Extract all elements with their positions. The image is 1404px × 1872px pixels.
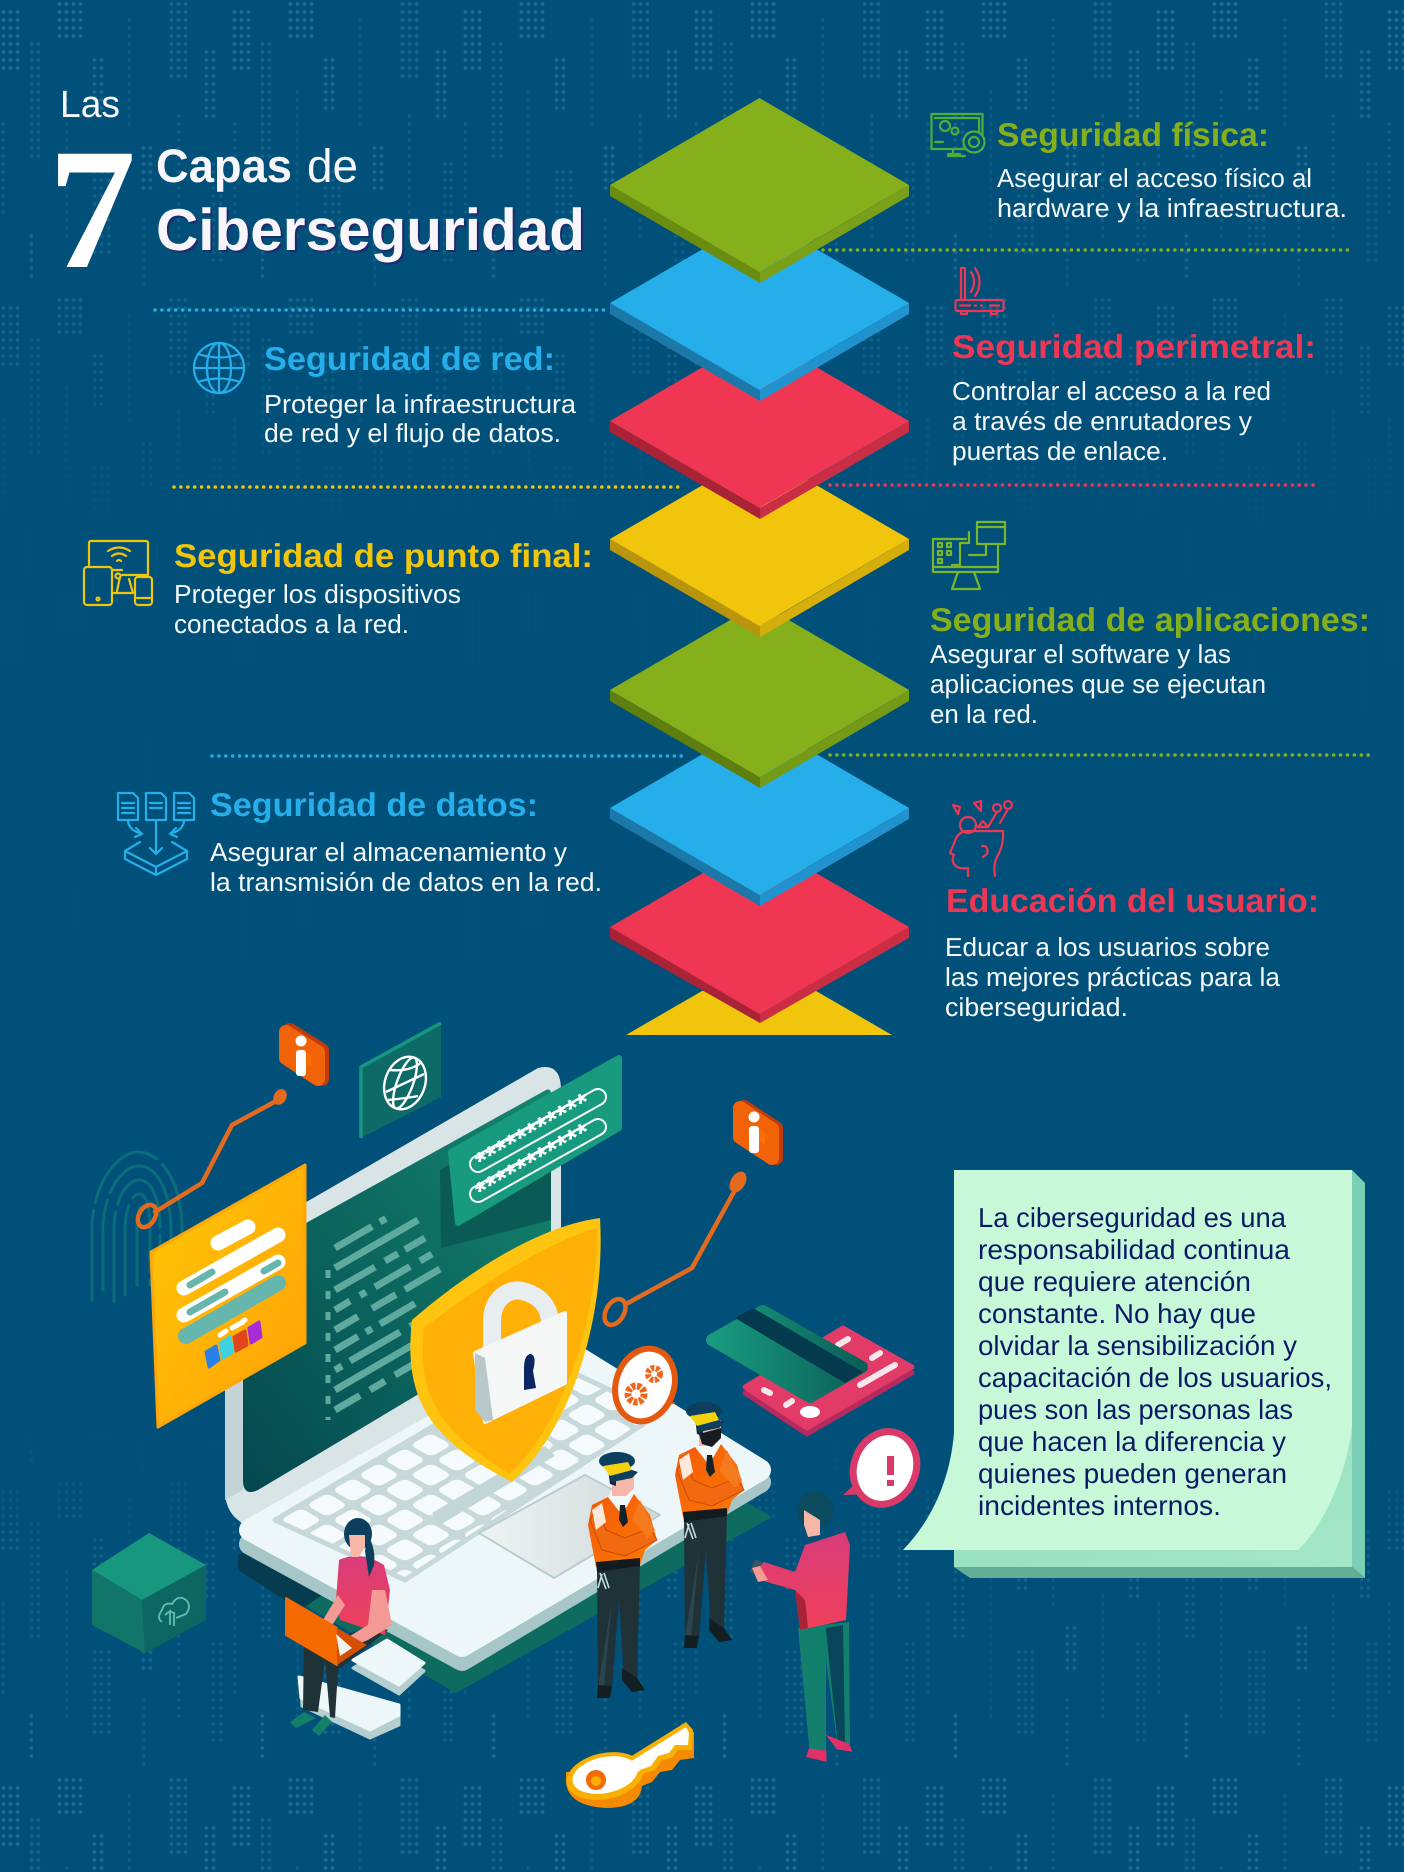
heading: Seguridad de datos: bbox=[210, 786, 538, 823]
note text: quienes pueden generan bbox=[978, 1458, 1287, 1489]
icon: head with ideas bbox=[950, 801, 1012, 876]
description: conectados a la red. bbox=[174, 609, 409, 639]
description bbox=[945, 932, 1281, 1022]
heading: Educación del usuario: bbox=[946, 882, 1319, 919]
description: de red y el flujo de datos. bbox=[264, 418, 561, 448]
panel: seguridad perimetral bbox=[952, 268, 1316, 466]
description: Educar a los usuarios sobre bbox=[945, 932, 1270, 962]
heading: Seguridad de red: bbox=[264, 340, 555, 377]
layer: bottom yellow clipped bbox=[626, 991, 892, 1035]
code lines on screen bbox=[328, 1218, 440, 1420]
heading: Seguridad física: bbox=[997, 116, 1269, 153]
security guard 1 bbox=[588, 1452, 657, 1698]
description: Proteger los dispositivos bbox=[174, 579, 461, 609]
bench bbox=[299, 1640, 424, 1738]
exclamation speech bubble bbox=[843, 1423, 927, 1513]
dotted dividers bbox=[155, 250, 1369, 756]
shield with padlock bbox=[410, 1218, 601, 1482]
description: Asegurar el acceso físico al bbox=[997, 163, 1312, 193]
note text: que requiere atención bbox=[978, 1266, 1251, 1297]
layer: red 2 bbox=[610, 840, 909, 1023]
note text: incidentes internos. bbox=[978, 1490, 1221, 1521]
panel: educación del usuario bbox=[945, 801, 1319, 1022]
panel: seguridad de red bbox=[194, 340, 577, 448]
illustration: isometric laptop security scene bbox=[92, 1023, 927, 1808]
orange connector left bbox=[134, 1090, 286, 1230]
gear speech bubble bbox=[606, 1341, 684, 1429]
title: Ciberseguridad: Ciberseguridad bbox=[156, 197, 585, 263]
password panel: *********** bbox=[470, 1086, 597, 1176]
note text: capacitación de los usuarios, bbox=[978, 1362, 1332, 1393]
note face bbox=[903, 1170, 1352, 1550]
description: Controlar el acceso a la red bbox=[952, 376, 1271, 406]
description bbox=[930, 639, 1266, 729]
description bbox=[997, 163, 1347, 223]
note text bbox=[978, 1202, 1332, 1521]
laptop shadow base bbox=[238, 1475, 772, 1693]
heading: Seguridad perimetral: bbox=[952, 328, 1316, 365]
description: Asegurar el almacenamiento y bbox=[210, 837, 567, 867]
description bbox=[952, 376, 1271, 466]
icon: globe bbox=[194, 343, 244, 393]
globe panel bbox=[361, 1023, 441, 1138]
layer stack of isometric diamonds bbox=[610, 98, 909, 1035]
note text: pues son las personas las bbox=[978, 1394, 1293, 1425]
password panel: *********** bbox=[470, 1116, 597, 1206]
panel: seguridad de datos bbox=[118, 786, 602, 897]
layer: blue 2 bbox=[610, 721, 909, 906]
icon: router bbox=[956, 268, 1004, 314]
title: Capas: Capas bbox=[156, 139, 292, 192]
description: la transmisión de datos en la red. bbox=[210, 867, 602, 897]
title: de: de bbox=[307, 139, 358, 192]
note text: La ciberseguridad es una bbox=[978, 1202, 1287, 1233]
panel: seguridad física bbox=[932, 114, 1347, 223]
layer: yellow bbox=[610, 452, 909, 637]
icon: applications on monitor bbox=[933, 522, 1005, 589]
panel: seguridad de aplicaciones bbox=[930, 522, 1370, 729]
standing woman with phone bbox=[749, 1491, 850, 1760]
info badge left bbox=[286, 1030, 322, 1079]
panel: seguridad de punto final bbox=[84, 537, 593, 639]
note text: olvidar la sensibilización y bbox=[978, 1330, 1297, 1361]
info badge right bbox=[740, 1107, 776, 1158]
laptop screen bbox=[225, 1067, 561, 1530]
icon: monitor with gears bbox=[932, 114, 984, 156]
description: Proteger la infraestructura bbox=[264, 389, 577, 419]
note text: que hacen la diferencia y bbox=[978, 1426, 1286, 1457]
card and phone bbox=[712, 1308, 912, 1434]
title: Las: Las bbox=[60, 84, 120, 126]
description: ciberseguridad. bbox=[945, 992, 1128, 1022]
layer: green 2 bbox=[610, 603, 909, 788]
description: aplicaciones que se ejecutan bbox=[930, 669, 1266, 699]
description: las mejores prácticas para la bbox=[945, 962, 1281, 992]
orange connector right bbox=[600, 1172, 747, 1329]
keyboard bbox=[275, 1360, 660, 1580]
description: hardware y la infraestructura. bbox=[997, 193, 1347, 223]
description: puertas de enlace. bbox=[952, 436, 1168, 466]
icon: connected devices bbox=[84, 541, 152, 605]
security guard 2 bbox=[675, 1402, 744, 1648]
trackpad bbox=[432, 1446, 660, 1578]
layer: blue bbox=[610, 216, 909, 401]
note text: responsabilidad continua bbox=[978, 1234, 1291, 1265]
key bbox=[562, 1722, 694, 1808]
green cloud cube bbox=[92, 1533, 206, 1653]
description bbox=[174, 579, 461, 639]
description bbox=[210, 837, 602, 897]
title: number 7: 7 bbox=[48, 114, 136, 305]
layer: green bbox=[610, 98, 909, 283]
description: a través de enrutadores y bbox=[952, 406, 1252, 436]
heading: Seguridad de aplicaciones: bbox=[930, 601, 1370, 638]
description: en la red. bbox=[930, 699, 1038, 729]
yellow login panel bbox=[151, 1165, 305, 1427]
note text: constante. No hay que bbox=[978, 1298, 1256, 1329]
title bbox=[48, 84, 585, 305]
password panel bbox=[451, 1058, 619, 1223]
note side faces bbox=[954, 1170, 1365, 1578]
callout: sticky note bbox=[903, 1170, 1365, 1578]
layer: red bbox=[610, 334, 909, 519]
seated woman with laptop bbox=[286, 1518, 392, 1736]
fingerprint bbox=[92, 1152, 182, 1302]
description: Asegurar el software y las bbox=[930, 639, 1231, 669]
heading: Seguridad de punto final: bbox=[174, 537, 593, 574]
description bbox=[264, 389, 577, 448]
laptop base bbox=[250, 1350, 760, 1660]
icon: documents into storage bbox=[118, 793, 194, 875]
